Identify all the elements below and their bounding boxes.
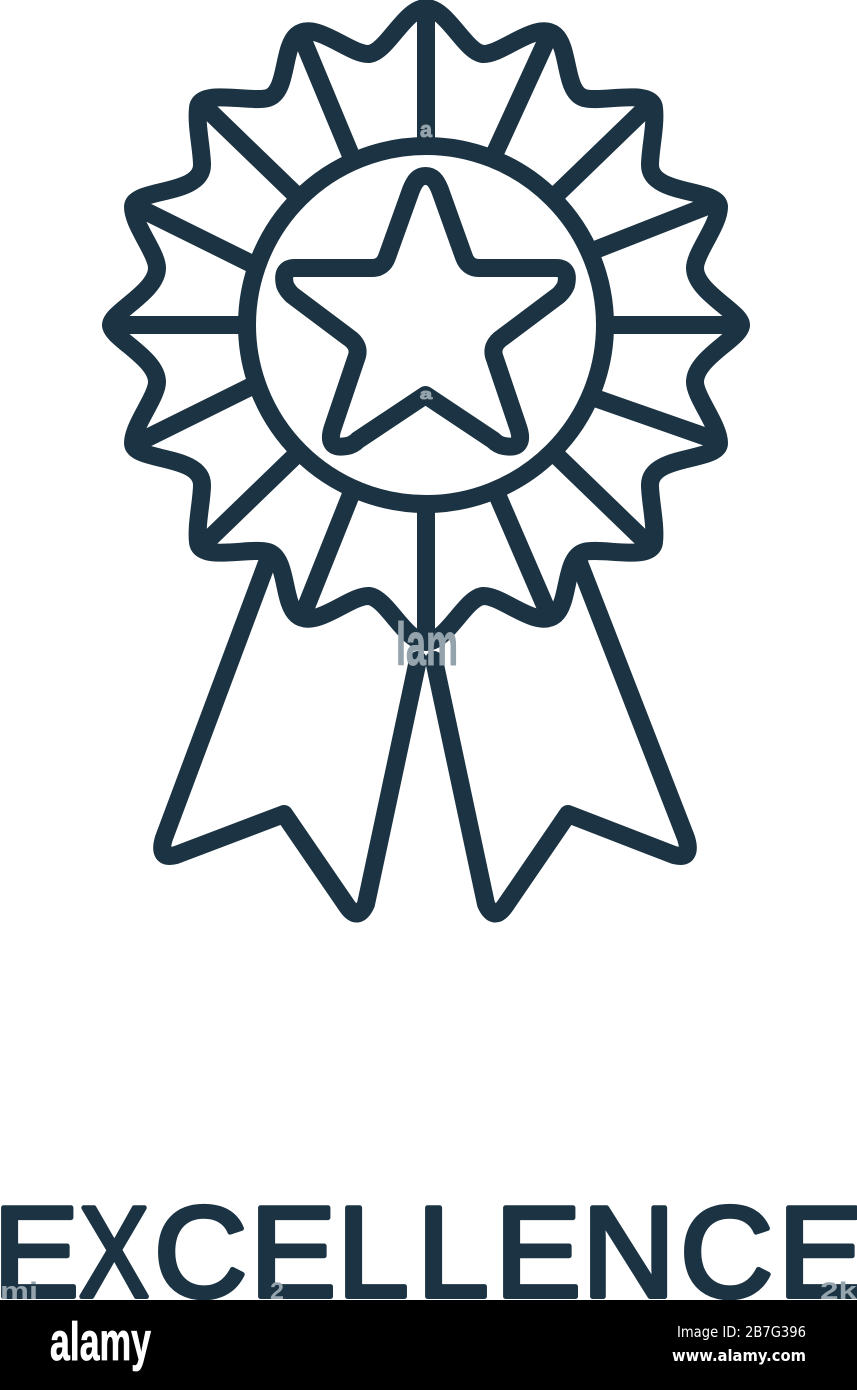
ribbon: right tail bbox=[434, 560, 688, 914]
watermark fragment right: 2k bbox=[820, 1278, 857, 1305]
rosette scalloped edge bbox=[111, 8, 741, 642]
star bbox=[284, 176, 567, 447]
website: www.alamy.com bbox=[672, 1346, 806, 1365]
image id: Image ID: 2B7G396 bbox=[677, 1323, 806, 1341]
watermark: alamy centre bbox=[396, 117, 458, 678]
title: EXCELLENCE: X bbox=[79, 1180, 149, 1324]
footer bar bbox=[0, 1300, 857, 1390]
alamy logo: alamy bbox=[50, 1312, 151, 1372]
footer background bbox=[0, 1300, 857, 1390]
title: EXCELLENCE: CELLENCE bbox=[154, 1180, 857, 1324]
watermark fragment middle: 2 bbox=[270, 1278, 284, 1305]
inner medallion circle bbox=[247, 146, 605, 504]
watermark text over ribbon knot: lam bbox=[396, 611, 458, 678]
rosette spokes bbox=[111, 8, 741, 642]
ribbon: left tail bbox=[162, 560, 418, 914]
watermark fragment left: mi bbox=[0, 1278, 38, 1305]
watermark fragments on title bbox=[0, 1278, 857, 1305]
watermark letter in star: a bbox=[420, 386, 433, 403]
icon: rosette award badge bbox=[111, 8, 741, 914]
watermark letter in upper spoke: a bbox=[420, 117, 433, 142]
